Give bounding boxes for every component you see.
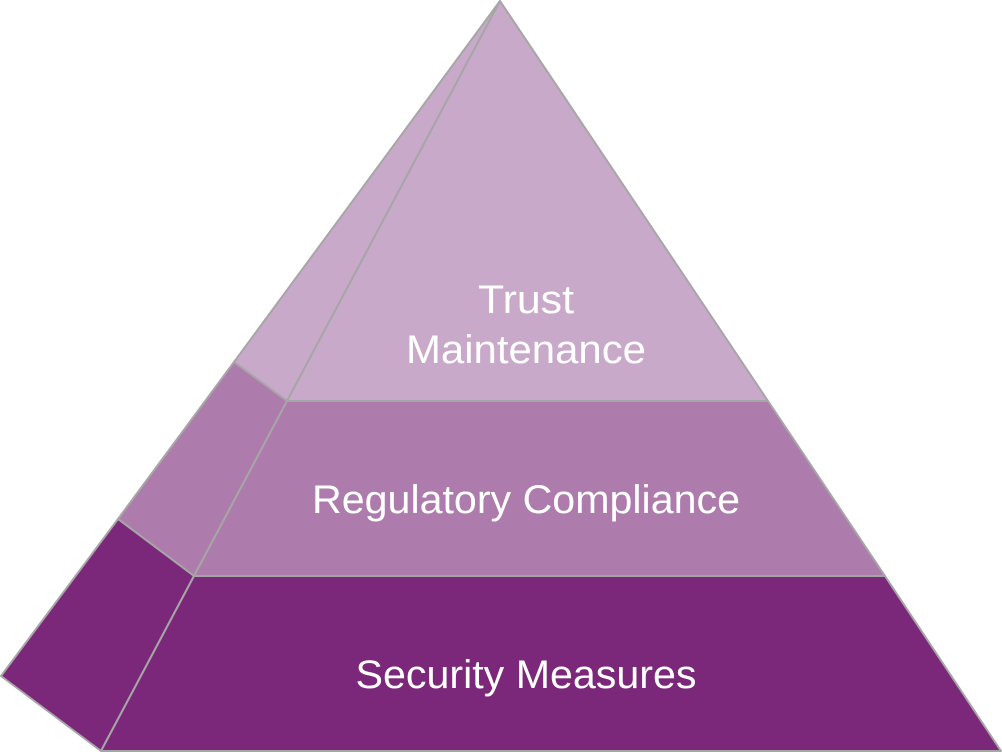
- tier: Trust Maintenance: Trust: [478, 278, 574, 322]
- tier: Trust Maintenance: [234, 1, 768, 401]
- tier: Regulatory Compliance: Regulatory Compliance: [312, 478, 740, 522]
- tier: Regulatory Compliance: [118, 362, 885, 576]
- tier: Security Measures: [1, 519, 1001, 751]
- tier: Security Measures: Security Measures: [356, 653, 696, 697]
- tier: Trust Maintenance: Maintenance: [406, 328, 646, 372]
